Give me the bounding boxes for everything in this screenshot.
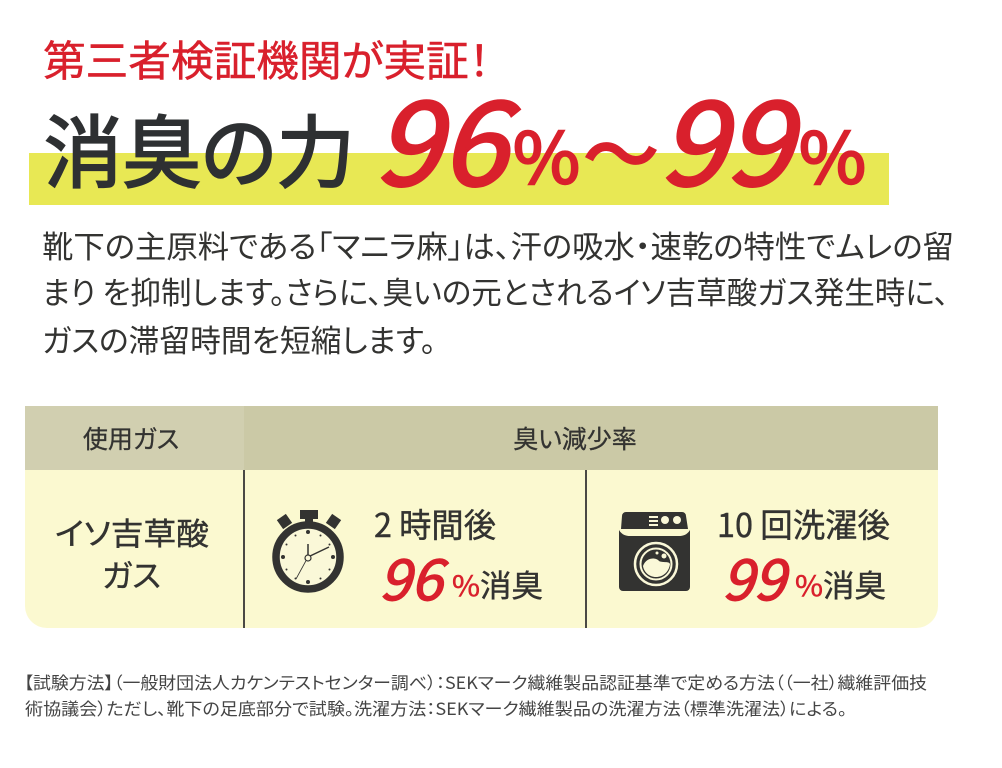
heading: deodorizing power 96% to 99%: % <box>799 103 866 204</box>
gas name: イソ吉草酸 <box>55 509 209 554</box>
heading: deodorizing power 96% to 99%: 消臭の力 <box>44 89 355 204</box>
heading: deodorizing power 96% to 99%: 99 <box>659 54 804 218</box>
body text: ガスの滞留時間を短縮します。 <box>42 316 436 361</box>
table: odor reduction results <box>25 406 938 628</box>
result: 99% deodorized: 99 <box>722 536 792 616</box>
body text <box>42 222 954 361</box>
header: odor reduction rate: 臭い減少率 <box>513 420 637 456</box>
result: 96% deodorized <box>379 536 543 616</box>
subtitle: third-party verification: 第三者検証機関が実証！ <box>43 28 490 89</box>
label: after 2 hours: 2 時間後 <box>374 499 496 547</box>
heading: deodorizing power 96% to 99% <box>29 54 889 218</box>
icon: stopwatch <box>276 510 341 589</box>
heading: deodorizing power 96% to 99%: 96 <box>374 54 520 218</box>
body text: まり を抑制します。さらに、臭いの元とされるイソ吉草酸ガス発生時に、 <box>42 268 949 313</box>
result: 99% deodorized <box>722 536 886 616</box>
body text: 靴下の主原料である「マニラ麻」は、汗の吸水・速乾の特性でムレの留 <box>42 222 954 267</box>
gas name <box>55 509 209 596</box>
heading: deodorizing power 96% to 99%: % <box>513 103 580 204</box>
header: gas used: 使用ガス <box>83 420 179 456</box>
footnote: test method: 術協議会）ただし、靴下の足底部分で試験。洗濯方法：SEKマーク繊維製品の洗濯方法（標準洗濯法）による。 <box>25 695 847 720</box>
result: 96% deodorized: 96 <box>379 536 449 616</box>
icon: washing machine <box>619 512 690 591</box>
heading: deodorizing power 96% to 99%: ～ <box>584 97 658 202</box>
label: after 10 washes: 10 回洗濯後 <box>717 499 890 547</box>
table body background <box>25 470 938 628</box>
footnote: test method <box>24 669 927 720</box>
header: gas used <box>25 406 244 470</box>
footnote: test method: 【試験方法】（一般財団法人カケンテストセンター調べ）：SEKマーク繊維製品認証基準で定める方法（（一社）繊維評価技 <box>24 669 927 694</box>
result: 96% deodorized: 消臭 <box>480 561 543 606</box>
gas name: ガス <box>102 551 161 596</box>
result: 99% deodorized: % <box>795 565 823 605</box>
header: odor reduction rate <box>244 406 938 470</box>
result: 99% deodorized: 消臭 <box>823 561 886 606</box>
result: 96% deodorized: % <box>452 565 480 605</box>
